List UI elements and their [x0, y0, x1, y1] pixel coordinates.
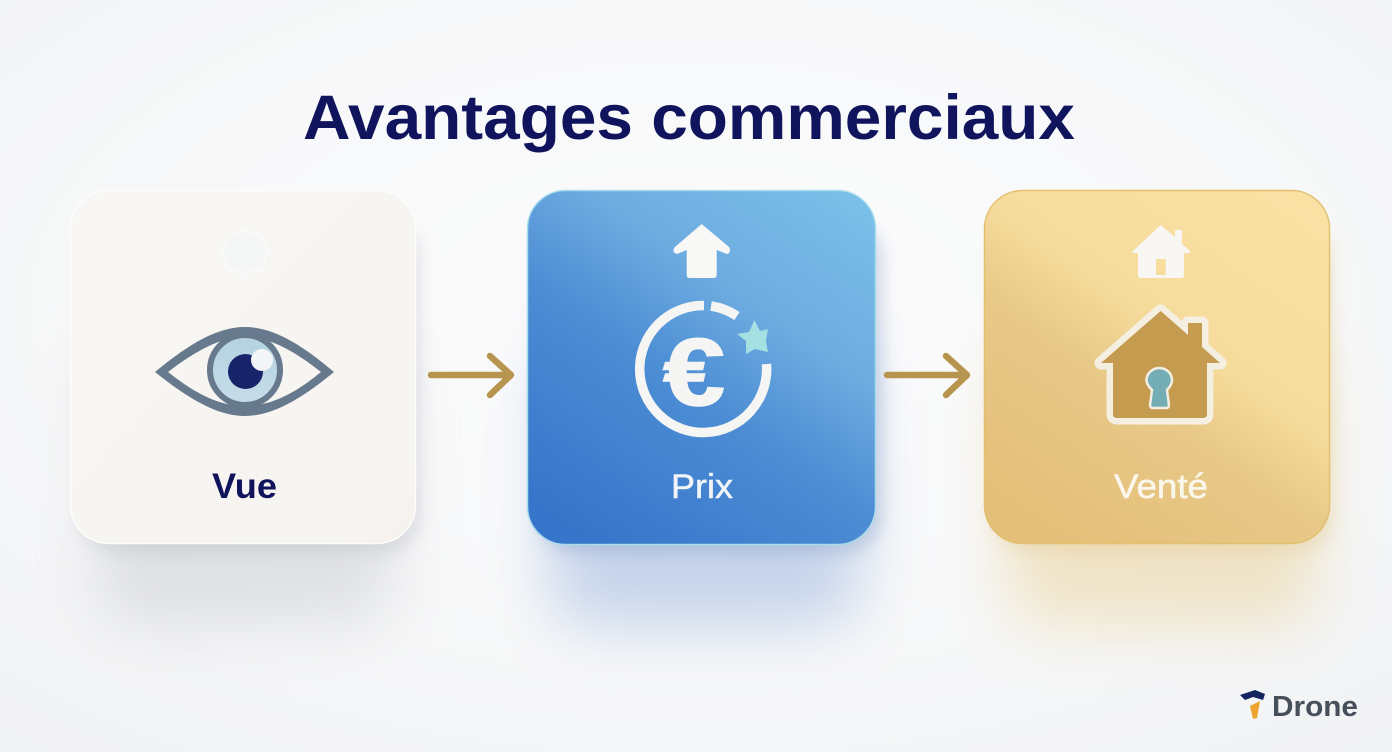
star — [737, 320, 768, 354]
house body — [1101, 311, 1220, 418]
icon: up arrow house — [673, 224, 730, 278]
coin ring — [640, 305, 767, 432]
icon: house with keyhole — [1101, 311, 1220, 418]
card contact shadow: vente — [992, 220, 1334, 553]
logo stem — [1250, 701, 1260, 719]
label: vue: Vue — [212, 467, 277, 506]
card background: vue — [70, 190, 416, 544]
panel: vente — [984, 190, 1330, 544]
icon: small house — [1132, 225, 1190, 278]
logo: Drone — [1240, 690, 1358, 723]
title: Avantages commerciaux — [303, 83, 1075, 153]
card contact shadow: vue — [80, 220, 420, 553]
panel: vue — [70, 190, 416, 544]
eye outline — [155, 327, 334, 416]
keyhole — [1146, 368, 1172, 408]
card shadow: vue — [95, 340, 395, 625]
card background: vente — [984, 190, 1330, 544]
arrow: vue to prix — [431, 356, 511, 395]
card shadow: vente — [1006, 340, 1316, 625]
icon: eye — [155, 327, 334, 416]
card shadow: prix — [550, 340, 860, 625]
card background: prix — [528, 190, 876, 544]
icon: euro coin — [640, 305, 768, 432]
logo icon — [1240, 690, 1265, 719]
panel: prix — [528, 190, 876, 544]
logo swoosh — [1240, 690, 1265, 700]
card contact shadow: prix — [537, 220, 882, 553]
logo wordmark: Drone — [1272, 691, 1358, 723]
iris — [210, 335, 280, 405]
highlight — [251, 349, 273, 371]
icon: faint house badge — [220, 228, 270, 277]
pupil — [228, 354, 263, 389]
label: prix: Prix — [671, 468, 733, 506]
euro sign: € — [663, 319, 725, 426]
arrow: prix to vente — [887, 356, 967, 395]
label: vente: Venté — [1114, 468, 1208, 506]
